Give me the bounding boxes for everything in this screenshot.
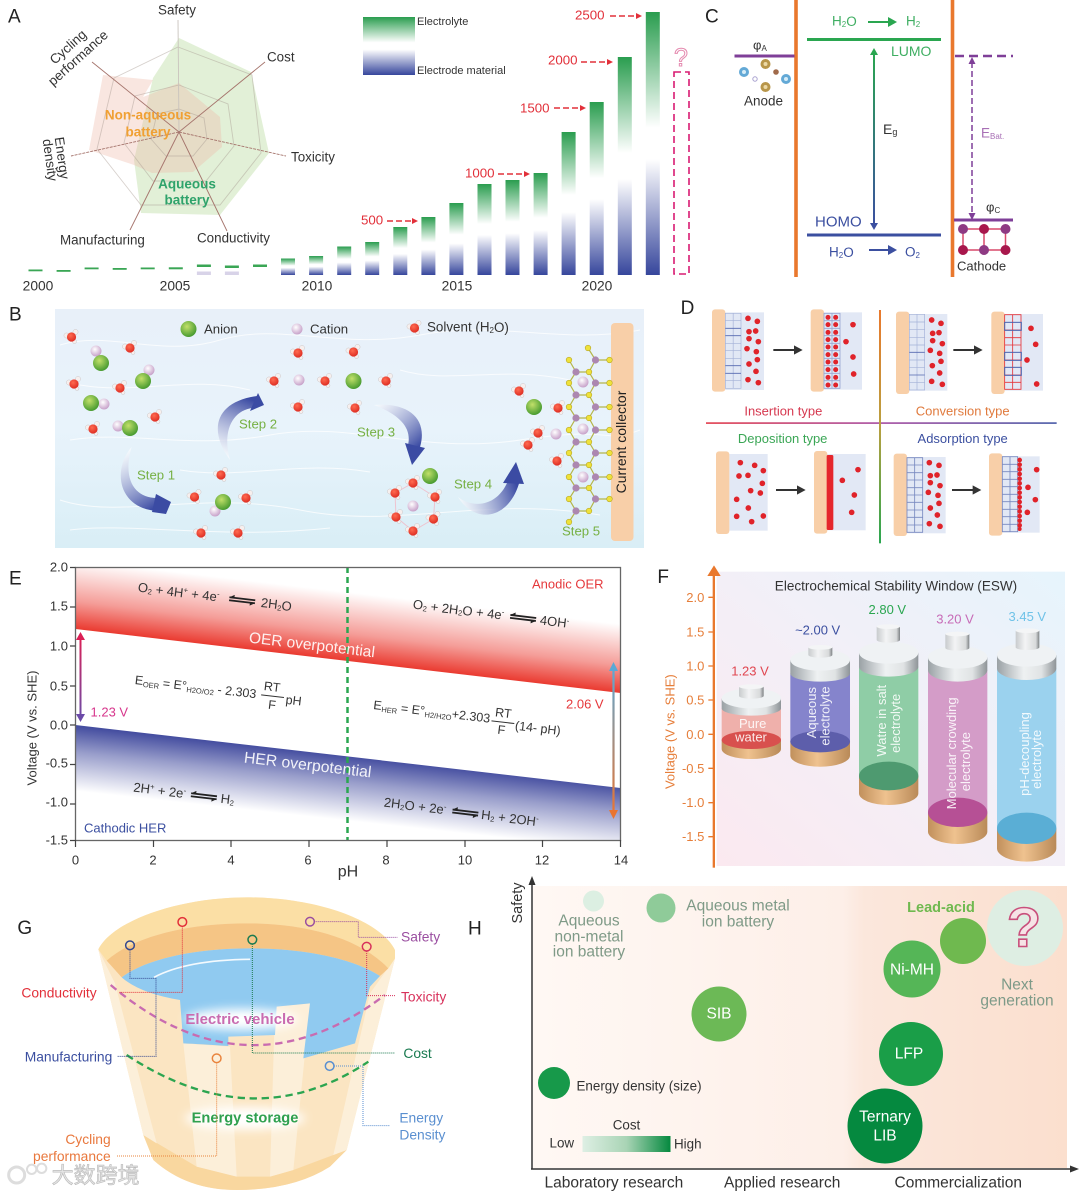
equation: E OER xyxy=(133,664,304,715)
reaction: alkaline HER: 2 xyxy=(490,814,495,823)
region labels: Cathodic HER xyxy=(84,820,166,836)
bar chart by year: ? xyxy=(674,44,688,72)
reaction: acidic OER: 2H xyxy=(260,595,278,612)
panel letter G: G xyxy=(17,918,32,939)
plot background xyxy=(533,886,1067,1168)
callout: cycling performance: performance xyxy=(33,1148,111,1164)
reaction: alkaline HER: 2H xyxy=(383,795,401,811)
axes and ticks: -1.0 xyxy=(46,794,68,810)
OER band xyxy=(76,567,620,693)
callout: manufacturing xyxy=(25,941,156,1065)
bubble: SIB: SIB xyxy=(707,1006,731,1022)
bar chart by year: 2000 xyxy=(23,278,54,294)
anode: A xyxy=(761,44,767,52)
reaction: alkaline OER: O xyxy=(412,597,424,613)
bubble: aqueous non-metal ion battery xyxy=(553,890,625,960)
callout: toxicity: Toxicity xyxy=(401,989,446,1005)
bubble: aqueous non-metal ion battery: non-metal xyxy=(555,928,623,946)
energy storage label and arc xyxy=(127,1055,368,1126)
HOMO level: O xyxy=(905,244,916,260)
voltage axis: 2.0 xyxy=(686,590,704,605)
reaction: alkaline HER: - xyxy=(536,813,540,823)
legend: cost colour bar: Cost xyxy=(613,1118,641,1132)
axes and ticks: pH xyxy=(338,864,358,880)
radar chart xyxy=(40,2,335,248)
bubble: LFP xyxy=(879,1022,943,1086)
energy storage label and arc: Energy storage xyxy=(192,1110,298,1126)
bubble: Ni-MH xyxy=(884,940,940,998)
OER overpotential label: OER overpotential xyxy=(248,630,376,661)
callout: cost: Cost xyxy=(403,1045,432,1061)
battery: molecular crowding electrolyte: Molecular crowding xyxy=(944,697,959,809)
conversion type diagram xyxy=(896,312,1043,418)
battery: aqueous electrolyte: electrolyte xyxy=(817,686,832,746)
reaction: acidic HER: H xyxy=(220,791,231,807)
anode: φ xyxy=(753,38,761,52)
LUMO level: 2 xyxy=(916,20,921,28)
bubble: SIB xyxy=(692,986,746,1042)
bulk electrolyte ions xyxy=(64,329,162,436)
LUMO level: H xyxy=(832,14,842,28)
glow behind energy storage xyxy=(185,1107,305,1130)
equation: E OER: = E° xyxy=(159,676,188,693)
battery: aqueous electrolyte: Aqueous xyxy=(804,687,819,738)
electric vehicle label and arc xyxy=(111,985,385,1045)
bubble: lead-acid xyxy=(907,900,986,964)
equation: E HER: HER xyxy=(381,704,398,715)
bucket body xyxy=(98,897,395,1190)
panel F: electrochemical stability window batteries xyxy=(657,565,1065,868)
axes and ticks: -1.5 xyxy=(46,832,68,848)
anode: Anode xyxy=(744,94,783,108)
1.23 V window arrow xyxy=(76,632,128,722)
pH 7 dashed line xyxy=(346,567,349,840)
bubble: ternary LIB: Ternary xyxy=(859,1108,911,1126)
step labels: Step 3 xyxy=(357,424,395,440)
legend: anion, cation, solvent: 2 xyxy=(490,326,495,334)
equation: E HER: +2.303 xyxy=(451,707,491,726)
battery: pure water: water xyxy=(734,729,768,744)
voltage axis: 0.5 xyxy=(686,692,704,707)
bar chart by year: 2005 xyxy=(160,278,191,294)
bar chart by year: 2010 xyxy=(302,278,333,294)
reaction: alkaline HER: 2 xyxy=(400,802,405,812)
solvated ions group, step 1 xyxy=(187,467,253,540)
voltage axis: -1.5 xyxy=(682,829,704,844)
voltage axis: -1.0 xyxy=(682,795,704,810)
milestone labels with dashed red arrows: 500 xyxy=(361,212,383,228)
voltage axis: -0.5 xyxy=(682,761,704,776)
legend: cost colour bar xyxy=(550,1118,702,1152)
bubble: ternary LIB: LIB xyxy=(873,1128,897,1144)
milestone labels with dashed red arrows: 2500 xyxy=(575,8,605,22)
voltage axis: 1.5 xyxy=(686,624,704,639)
axes and ticks: 0 xyxy=(72,852,79,868)
callout: energy density: Density xyxy=(399,1126,446,1142)
HER band xyxy=(76,725,620,840)
legend: cost colour bar: Low xyxy=(550,1136,574,1150)
current collector xyxy=(611,323,634,541)
battery: pure water: Pure xyxy=(739,716,766,731)
panel B: solvation process xyxy=(9,304,644,548)
battery: pH-decoupling electrolyte: 3.45 V xyxy=(1009,609,1046,624)
battery: water in salt electrolyte: Watre in salt xyxy=(874,684,889,757)
reaction: acidic HER xyxy=(133,780,235,807)
reaction: acidic OER: O xyxy=(137,580,149,596)
1.23 V window arrow: 1.23 V xyxy=(90,704,128,720)
battery: molecular crowding electrolyte: 3.20 V xyxy=(936,611,974,626)
radar chart: Non-aqueous xyxy=(105,108,191,122)
panel H: safety vs commercialization bubble chart xyxy=(468,876,1079,1192)
callout: cycling performance: Cycling xyxy=(65,1131,111,1147)
region labels xyxy=(84,576,604,836)
bubble: lead-acid: Lead-acid xyxy=(907,900,975,916)
Eg double arrow xyxy=(870,48,897,230)
anode xyxy=(734,38,794,108)
legend: anion, cation, solvent xyxy=(180,320,509,337)
conversion type diagram: Conversion type xyxy=(916,403,1010,418)
battery: pH-decoupling electrolyte: electrolyte xyxy=(1029,730,1044,789)
HOMO level: HOMO xyxy=(815,214,862,230)
reaction: alkaline OER: - xyxy=(502,607,506,616)
reaction: alkaline HER: O + 2e xyxy=(404,797,445,816)
bar chart by year: 2020 xyxy=(582,278,613,294)
water surface xyxy=(122,948,380,1058)
bubble: Ni-MH: Ni-MH xyxy=(890,962,934,978)
LUMO level: 2 xyxy=(842,20,847,28)
insertion type diagram: Insertion type xyxy=(744,403,822,418)
ions near electrode, step 4 xyxy=(511,383,565,468)
radar chart: battery xyxy=(164,192,210,208)
deposition type diagram: Deposition type xyxy=(738,431,827,446)
panel D: charge storage types xyxy=(681,298,1057,543)
equation: E HER xyxy=(372,691,563,744)
axes and ticks: 2.0 xyxy=(50,560,68,574)
reaction: alkaline HER: H xyxy=(480,807,491,823)
reaction: alkaline OER: 2 xyxy=(458,608,463,617)
equation: E OER: OER xyxy=(142,679,160,690)
battery: aqueous electrolyte: ~2.00 V xyxy=(795,622,841,637)
Eg double arrow: g xyxy=(892,127,897,137)
reaction: acidic OER: 2 xyxy=(147,587,152,596)
axes and ticks: 4 xyxy=(227,852,235,868)
reaction: alkaline OER xyxy=(412,597,571,631)
reaction: acidic OER: O xyxy=(281,597,293,614)
reaction: acidic OER: + 4e xyxy=(187,585,218,604)
LUMO level: LUMO xyxy=(891,43,932,59)
reaction: alkaline OER: O + 4e xyxy=(462,602,503,622)
insertion type diagram xyxy=(712,309,862,418)
equation: E HER: H2/H2O xyxy=(424,710,452,722)
HOMO level: 2 xyxy=(839,250,844,260)
cathode xyxy=(954,56,1013,274)
panel letter D: D xyxy=(681,298,694,319)
reaction: alkaline OER: - xyxy=(566,616,570,625)
battery: aqueous electrolyte xyxy=(790,622,850,767)
battery: pure water: 1.23 V xyxy=(731,663,769,678)
axes and ticks: 0.0 xyxy=(50,718,68,732)
solvation shell group, step 3 xyxy=(387,468,442,538)
reaction: alkaline OER: 4OH xyxy=(539,612,567,630)
axes and ticks: 2 xyxy=(149,852,157,868)
electric vehicle label and arc: Electric vehicle xyxy=(185,1011,295,1028)
reaction: acidic HER: + 2e xyxy=(153,782,184,800)
legend: electrolyte and electrode xyxy=(363,16,506,77)
axes and ticks: 14 xyxy=(614,852,628,868)
milestone labels with dashed red arrows: 1000 xyxy=(465,166,495,180)
voltage axis xyxy=(662,565,721,868)
milestone labels with dashed red arrows: 1500 xyxy=(520,100,550,116)
legend: energy density size: Energy density (size) xyxy=(576,1078,702,1094)
bubble: next generation xyxy=(980,890,1063,1010)
legend: cost colour bar: High xyxy=(674,1136,702,1152)
legend: energy density size xyxy=(538,1067,702,1099)
callout: manufacturing: Manufacturing xyxy=(25,1049,112,1065)
axes: Commercialization xyxy=(894,1174,1022,1192)
step labels: Step 1 xyxy=(137,468,175,482)
battery: pH-decoupling electrolyte xyxy=(997,609,1056,862)
glow behind electric vehicle xyxy=(185,1009,298,1030)
axes and ticks: 12 xyxy=(535,852,549,868)
callout: energy density xyxy=(325,1062,446,1142)
axes and ticks xyxy=(24,560,628,880)
reaction: acidic HER: 2 xyxy=(229,798,234,807)
adsorption type diagram xyxy=(894,431,1040,536)
equation: E HER: F xyxy=(497,723,506,738)
step labels xyxy=(137,416,600,538)
reaction: alkaline HER: + 2OH xyxy=(494,809,537,828)
equation: E OER: F xyxy=(267,698,277,713)
2.06 V window arrow xyxy=(566,662,618,819)
panel A: radar and publications chart xyxy=(8,2,689,294)
step labels: Step 4 xyxy=(454,476,492,492)
bubble: aqueous non-metal ion battery: Aqueous xyxy=(558,912,620,930)
current collector: Current collector xyxy=(613,390,629,493)
panel letter E: E xyxy=(9,568,22,590)
equation: E OER: RT xyxy=(263,679,281,695)
equation: E HER: (14- pH) xyxy=(514,719,561,738)
axes and ticks: 1.5 xyxy=(50,598,68,614)
adsorption type diagram: Adsorption type xyxy=(918,431,1008,446)
electrode walls xyxy=(794,0,954,277)
panel letter C: C xyxy=(705,6,719,28)
milestone labels with dashed red arrows xyxy=(361,8,642,228)
cathode: C xyxy=(994,206,1000,214)
bar chart by year xyxy=(23,12,689,294)
reaction: acidic OER: 2 xyxy=(277,603,282,612)
radar chart: Safety xyxy=(158,2,196,18)
legend: anion, cation, solvent: O) xyxy=(494,320,509,334)
axes and ticks: 0.5 xyxy=(50,678,68,694)
region labels: Anodic OER xyxy=(532,576,604,592)
legend: electrolyte and electrode: Electrolyte xyxy=(417,16,468,28)
bar chart by year: 2015 xyxy=(442,278,473,294)
watermark: 大数跨境 xyxy=(52,1163,140,1188)
battery: pH-decoupling electrolyte: pH-decoupling xyxy=(1017,712,1032,796)
axes xyxy=(510,876,1079,1192)
HER overpotential label: HER overpotential xyxy=(243,750,372,781)
dividers xyxy=(706,310,1057,543)
equation: E HER: = E° xyxy=(397,701,426,718)
axes and ticks: 8 xyxy=(382,852,390,868)
panel letter F: F xyxy=(657,567,669,588)
LUMO level: O xyxy=(846,14,857,28)
reaction: acidic HER: 2H xyxy=(133,780,151,796)
radar chart: battery xyxy=(125,124,171,140)
bubble: aqueous non-metal ion battery: ion battery xyxy=(553,944,625,960)
battery: pure water xyxy=(722,663,781,759)
panel letter A: A xyxy=(8,6,21,28)
reaction: acidic OER: + 4H xyxy=(151,581,184,600)
callout: energy density: Energy xyxy=(399,1110,443,1126)
step arrows xyxy=(121,393,524,515)
panel G: bucket diagram xyxy=(9,897,446,1190)
legend: anion, cation, solvent: Cation xyxy=(310,322,348,336)
radar chart: Aqueous xyxy=(158,176,216,192)
LUMO level: H xyxy=(906,14,916,28)
bubble: next generation: ? xyxy=(1007,896,1041,958)
reaction: acidic OER: + xyxy=(183,585,189,594)
voltage axis: 0.0 xyxy=(686,727,704,742)
callout: cycling performance xyxy=(33,1054,221,1164)
ESW title: Electrochemical Stability Window (ESW) xyxy=(775,578,1017,593)
axes and ticks: 10 xyxy=(458,852,472,868)
battery: molecular crowding electrolyte: electrolyte xyxy=(958,732,973,791)
battery: water in salt electrolyte: electrolyte xyxy=(888,694,903,753)
callout: safety: Safety xyxy=(401,929,440,945)
callout: toxicity xyxy=(362,942,446,1005)
2.06 V window arrow: 2.06 V xyxy=(566,696,604,712)
bubble: aqueous metal ion battery xyxy=(646,894,790,930)
axes and ticks: -0.5 xyxy=(46,756,68,770)
axes and ticks: 1.0 xyxy=(50,638,68,654)
reaction: alkaline HER: - xyxy=(444,802,448,811)
callout: cost xyxy=(248,935,432,1061)
battery: water in salt electrolyte: 2.80 V xyxy=(869,602,906,617)
bubble: LFP: LFP xyxy=(895,1046,923,1062)
battery: water in salt electrolyte xyxy=(859,602,918,805)
axes: Applied research xyxy=(724,1174,840,1192)
panel E: Pourbaix voltage vs pH chart xyxy=(9,560,628,880)
reaction: acidic OER: - xyxy=(217,589,221,598)
Eg double arrow: E xyxy=(883,121,892,137)
callout: conductivity: Conductivity xyxy=(21,984,97,1000)
panel letter B: B xyxy=(9,304,22,326)
reaction: acidic HER: - xyxy=(183,785,187,795)
axes: Laboratory research xyxy=(544,1174,683,1192)
voltage axis: 1.0 xyxy=(686,658,704,673)
radar chart: Cycling xyxy=(47,27,89,67)
LUMO level xyxy=(807,14,941,59)
bubble: ternary LIB xyxy=(848,1088,922,1164)
cathode: E xyxy=(981,126,990,140)
equation: E OER: H2O/O2 xyxy=(186,685,214,697)
axes and ticks: 6 xyxy=(304,852,312,868)
equation: E OER: pH xyxy=(285,693,302,709)
radar chart: density xyxy=(40,138,60,182)
milestone labels with dashed red arrows: 2000 xyxy=(548,52,578,68)
panel letter H: H xyxy=(468,918,482,940)
deposition type diagram xyxy=(716,431,866,534)
equation: E HER: RT xyxy=(494,705,513,721)
bubble: aqueous metal ion battery: Aqueous metal xyxy=(686,898,790,914)
panel C: energy levels xyxy=(705,0,1013,277)
bubble: aqueous metal ion battery: ion battery xyxy=(702,914,774,930)
radar chart: Toxicity xyxy=(291,150,335,164)
HOMO level: H xyxy=(829,244,839,260)
cathode: Bat. xyxy=(990,132,1004,140)
callout: conductivity xyxy=(21,918,187,1000)
reaction: acidic HER: + xyxy=(150,781,156,791)
separated ions group, step 2 xyxy=(266,344,393,414)
legend: anion, cation, solvent: Anion xyxy=(204,322,238,336)
radar chart: Cost xyxy=(267,50,295,64)
radar chart: Energy xyxy=(52,136,72,180)
axes and ticks: Voltage (V vs. SHE) xyxy=(24,671,40,785)
callout: safety xyxy=(306,917,440,945)
equation: E OER: - 2.303 xyxy=(213,682,257,701)
gradient background xyxy=(717,572,1065,866)
equation: E OER: E xyxy=(134,673,144,688)
watermark xyxy=(9,1163,140,1188)
reaction: alkaline OER: 2 xyxy=(422,604,427,613)
voltage axis: Voltage (V vs. SHE) xyxy=(662,674,677,789)
battery: molecular crowding electrolyte xyxy=(928,611,987,844)
cathode: Cathode xyxy=(957,258,1006,274)
electrode lattice xyxy=(566,345,612,525)
equation: E HER: E xyxy=(373,698,383,713)
axes: Safety xyxy=(510,882,526,924)
HOMO level xyxy=(807,214,941,260)
step labels: Step 5 xyxy=(562,524,600,538)
reaction: alkaline OER: + 2H xyxy=(426,598,459,617)
reaction: alkaline HER xyxy=(383,795,540,829)
step labels: Step 2 xyxy=(239,416,277,432)
radar chart: Conductivity xyxy=(197,230,270,246)
HOMO level: 2 xyxy=(916,250,921,260)
HOMO level: O xyxy=(843,244,854,260)
reaction: acidic OER xyxy=(137,580,293,614)
radar chart: performance xyxy=(45,27,111,89)
radar chart: Manufacturing xyxy=(60,232,145,248)
legend: anion, cation, solvent: Solvent (H xyxy=(427,320,490,334)
bubble: next generation: Next xyxy=(1001,976,1034,994)
cathode: φ xyxy=(986,200,994,214)
water background xyxy=(55,309,644,548)
legend: electrolyte and electrode: Electrode material xyxy=(417,65,506,77)
bubble: next generation: generation xyxy=(980,992,1054,1010)
